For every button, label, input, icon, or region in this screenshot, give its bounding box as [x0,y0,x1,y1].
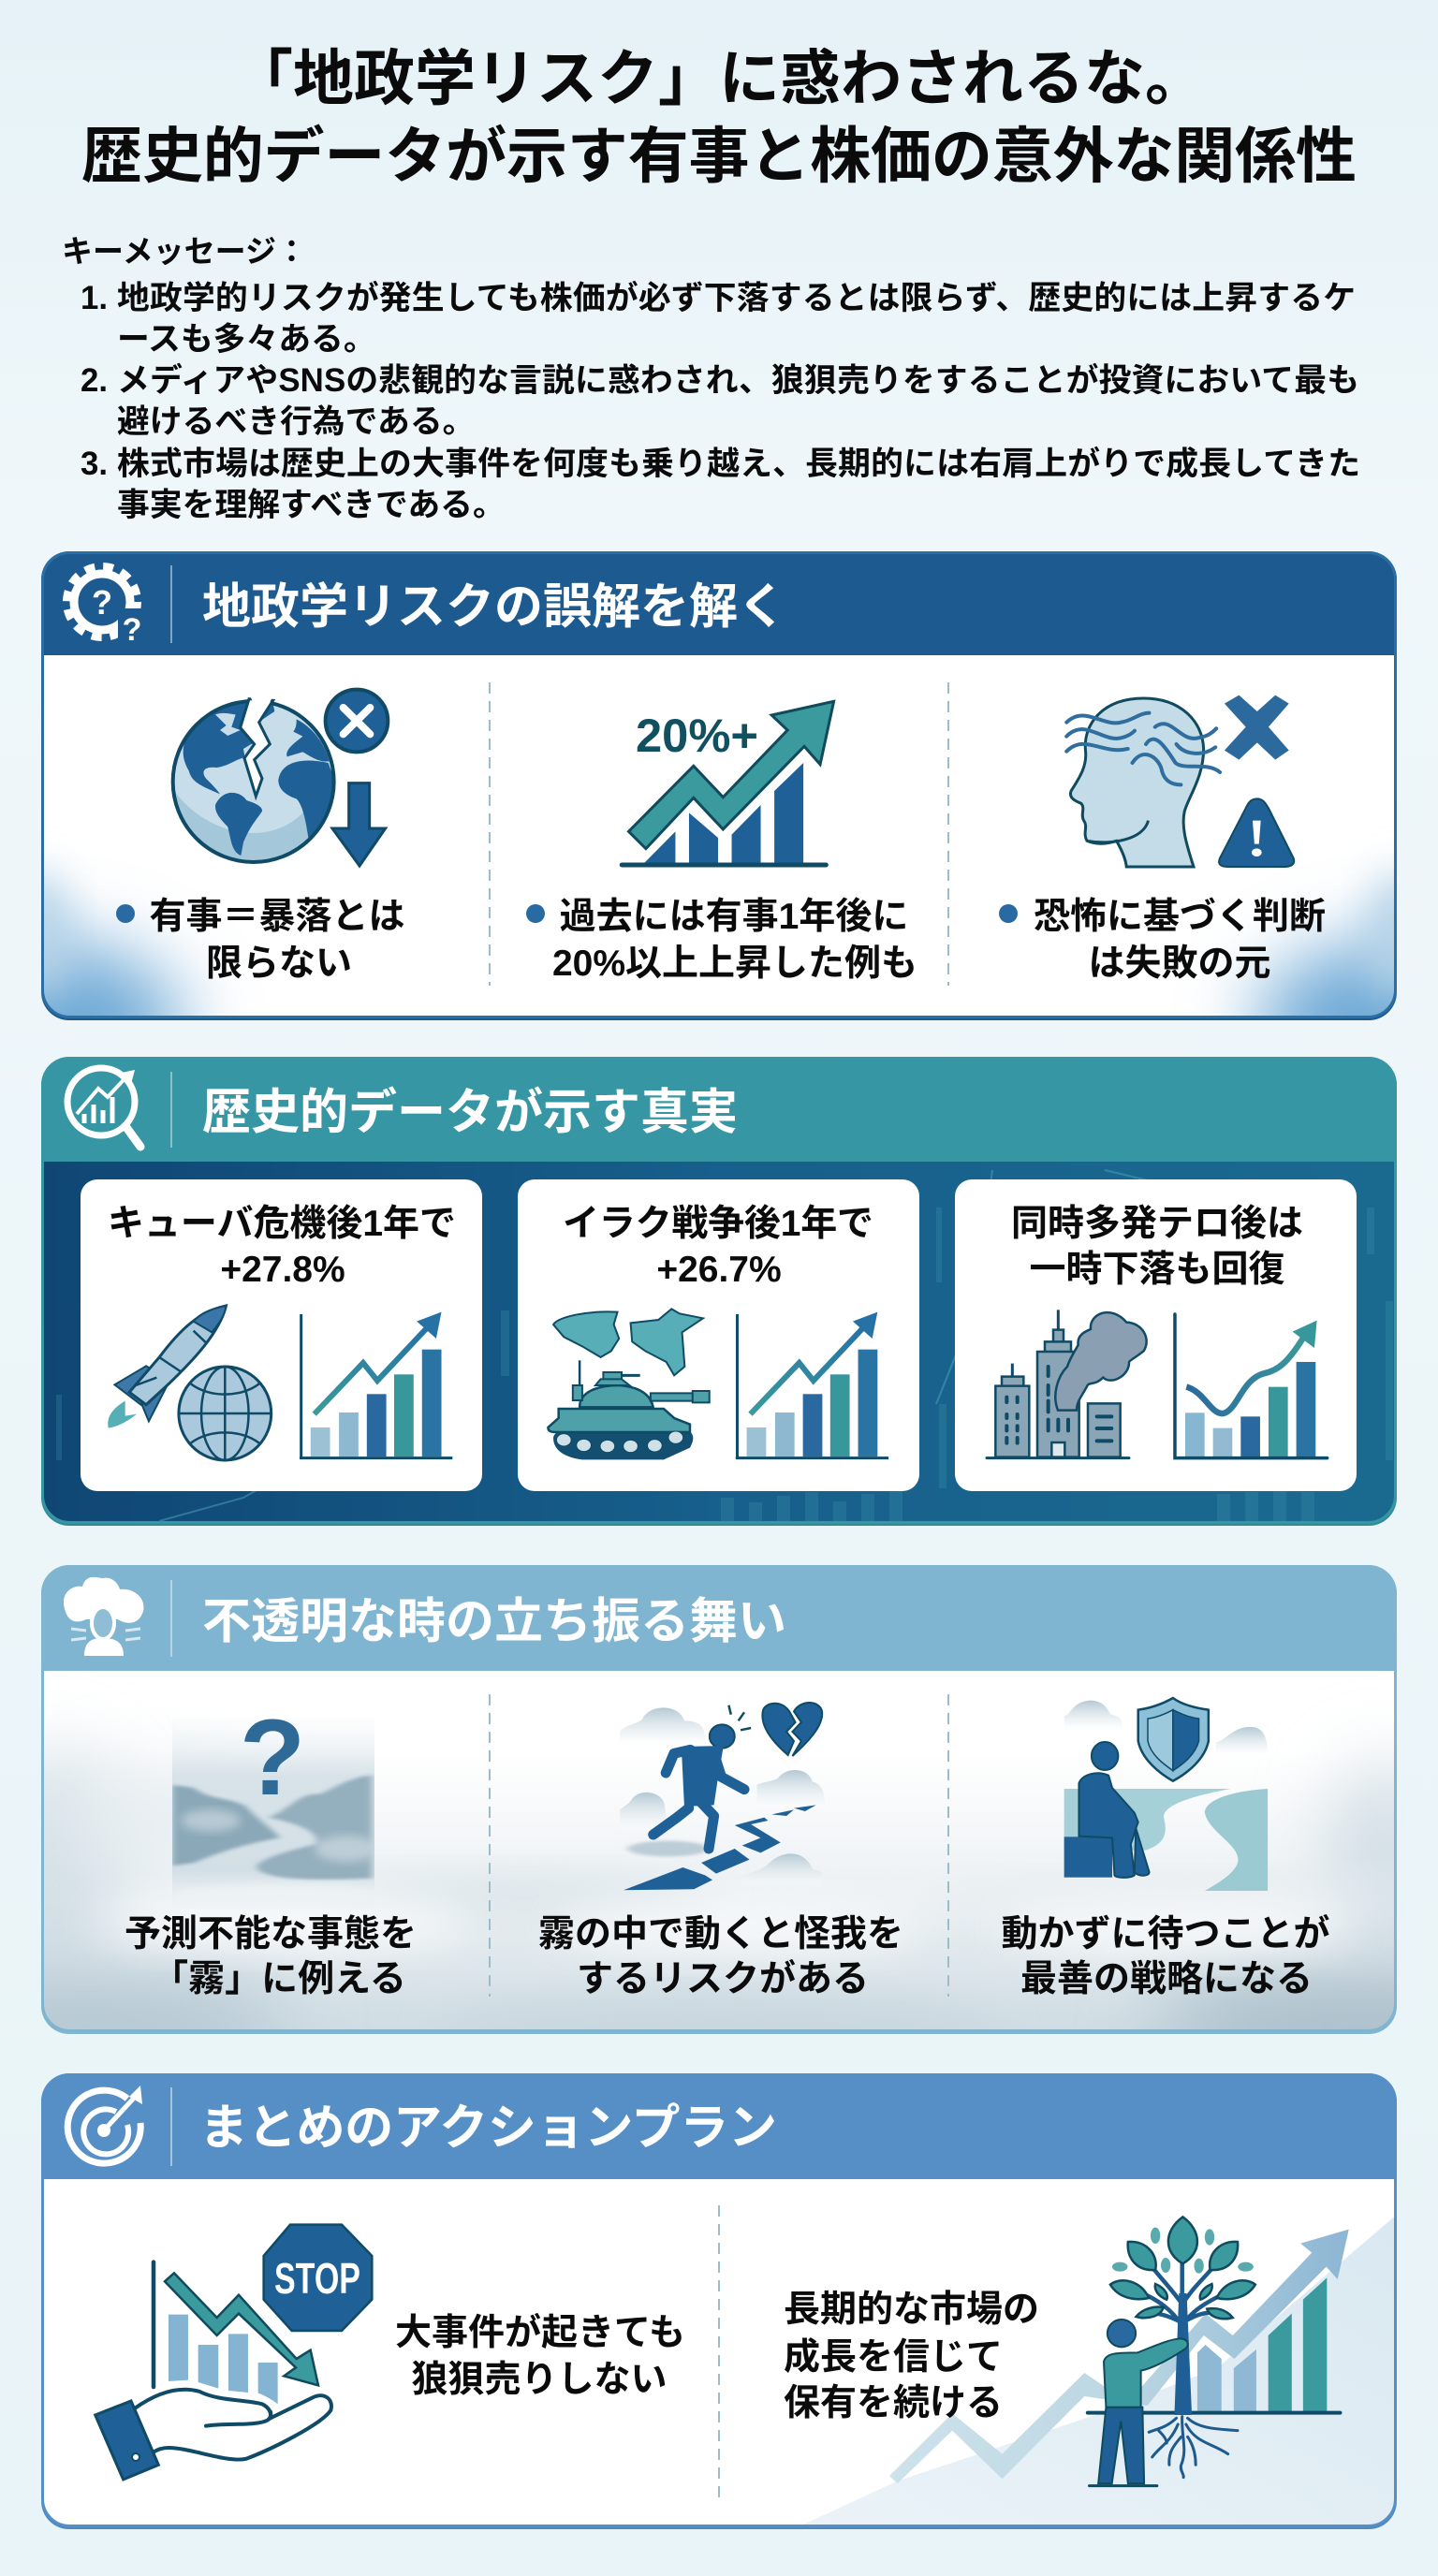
card: Cuban crisis [81,1179,482,1491]
action 2 text: 成長を信じて [784,2337,1003,2378]
heading: 歴史的データが示す真実 [202,1086,738,1140]
action 2 text: 保有を続ける [784,2383,1003,2423]
header icon: gear with question marks [66,566,148,648]
action 1 text: 大事件が起きても [395,2313,685,2353]
header icon: gear with question marks: ? [123,612,141,648]
icon: stop sign, falling chart and hand: STOP [274,2254,360,2303]
panel: what historical data shows [41,1057,1397,1526]
chart: rising bars [300,1312,452,1458]
card text: +26.7% [656,1250,782,1290]
key messages: 2. [81,362,108,399]
key messages: 株式市場は歴史上の大事件を何度も乗り越え、長期的には右肩上がりで成長してきた [117,446,1360,482]
heading: 地政学リスクの誤解を解く [202,580,786,635]
bullet 3: 恐怖に基づく判断 [1034,897,1326,937]
card text [108,1204,456,1290]
icon: foggy path with question mark [172,1719,374,1891]
chart: rising bars [736,1312,888,1458]
caption 3: 最善の戦略になる [1020,1959,1313,1999]
caption 1: 予測不能な事態を [125,1914,417,1954]
icon: rising arrow with 20%+: 20%+ [636,710,758,762]
bullet 1: 有事＝暴落とは [149,897,405,937]
key messages [62,234,1360,523]
title: 歴史的データが示す有事と株価の意外な関係性 [81,122,1357,190]
caption 2: するリスクがある [577,1959,869,1999]
key messages: メディアやSNSの悲観的な言説に惑わされ、狼狽売りをすることが投資において最も [117,361,1359,399]
header icon: person under cloud [64,1577,143,1656]
heading: まとめのアクションプラン [199,2101,777,2156]
divider lines [490,1694,948,1997]
title: 「地政学リスク」に惑わされるな。 [232,44,1206,112]
icon: head with anxious waves, cross and warning [1066,695,1294,867]
key messages: 事実を理解すべきである。 [117,487,506,523]
card text [563,1204,873,1290]
heading: 不透明な時の立ち振る舞い [202,1595,786,1649]
action 1 text: 狼狽売りしない [411,2360,668,2400]
panel: misconceptions about geopolitical risk [41,551,1397,1020]
key messages: 地政学的リスクが発生しても株価が必ず下落するとは限らず、歴史的には上昇するケ [117,280,1356,316]
panel: action plan [41,2073,1398,2529]
card text: 一時下落も回復 [1029,1250,1285,1290]
caption 1: 「霧」に例える [152,1959,406,1999]
card text: イラク戦争後1年で [563,1204,873,1244]
caption 3 [1001,1914,1330,1999]
action 1 text [395,2313,685,2400]
key messages: 1. [81,280,108,316]
icon: cracked globe with cross and down arrow [172,690,388,866]
card text [1011,1204,1303,1290]
bullet 2 [526,897,917,984]
card text: 同時多発テロ後は [1011,1204,1303,1244]
chart: dip and recovery [1175,1314,1328,1458]
title [81,44,1357,190]
icon: growth arrow with person tending tree [889,2217,1349,2486]
caption 2: 霧の中で動くと怪我を [538,1914,903,1954]
icon: foggy path with question mark: ? [240,1698,305,1818]
action 2 text: 長期的な市場の [784,2290,1039,2330]
key messages: キーメッセージ： [62,234,307,269]
bullet 2: 過去には有事1年後に [560,897,908,937]
bullet 3 [999,897,1326,984]
key messages: 3. [81,446,108,482]
caption 1 [125,1914,417,1999]
caption 2 [538,1914,903,1999]
action 2 text [784,2290,1039,2423]
icon: map and tank [548,1309,710,1459]
bullet 2: 20%以上上昇した例も [552,944,917,984]
header icon: target with arrow [67,2086,142,2163]
icon: missile and globe [108,1306,271,1460]
card: 9/11 [955,1179,1357,1491]
icon: burning skyscrapers [987,1310,1147,1458]
bullet 3: は失敗の元 [1088,944,1271,984]
bullet 1: 限らない [206,944,352,984]
caption 3: 動かずに待つことが [1001,1914,1330,1954]
card text: キューバ危機後1年で [108,1204,456,1244]
divider lines [490,682,948,986]
header icon: magnifier with chart [67,1068,140,1147]
icon: stop sign, falling chart and hand [95,2225,372,2480]
card text: +27.8% [220,1250,345,1290]
key messages: 避けるべき行為である。 [117,403,475,440]
header icon: gear with question marks: ? [92,583,112,622]
icon: stumbling walker on broken road [620,1703,825,1890]
icon: seated person with shield [1064,1698,1268,1891]
panel: behaviour in uncertain times [41,1565,1397,2034]
card: Iraq war [518,1179,919,1491]
key messages: ースも多々ある。 [117,321,376,358]
icon: rising arrow with 20%+ [622,701,834,865]
bullet 1 [116,897,405,984]
